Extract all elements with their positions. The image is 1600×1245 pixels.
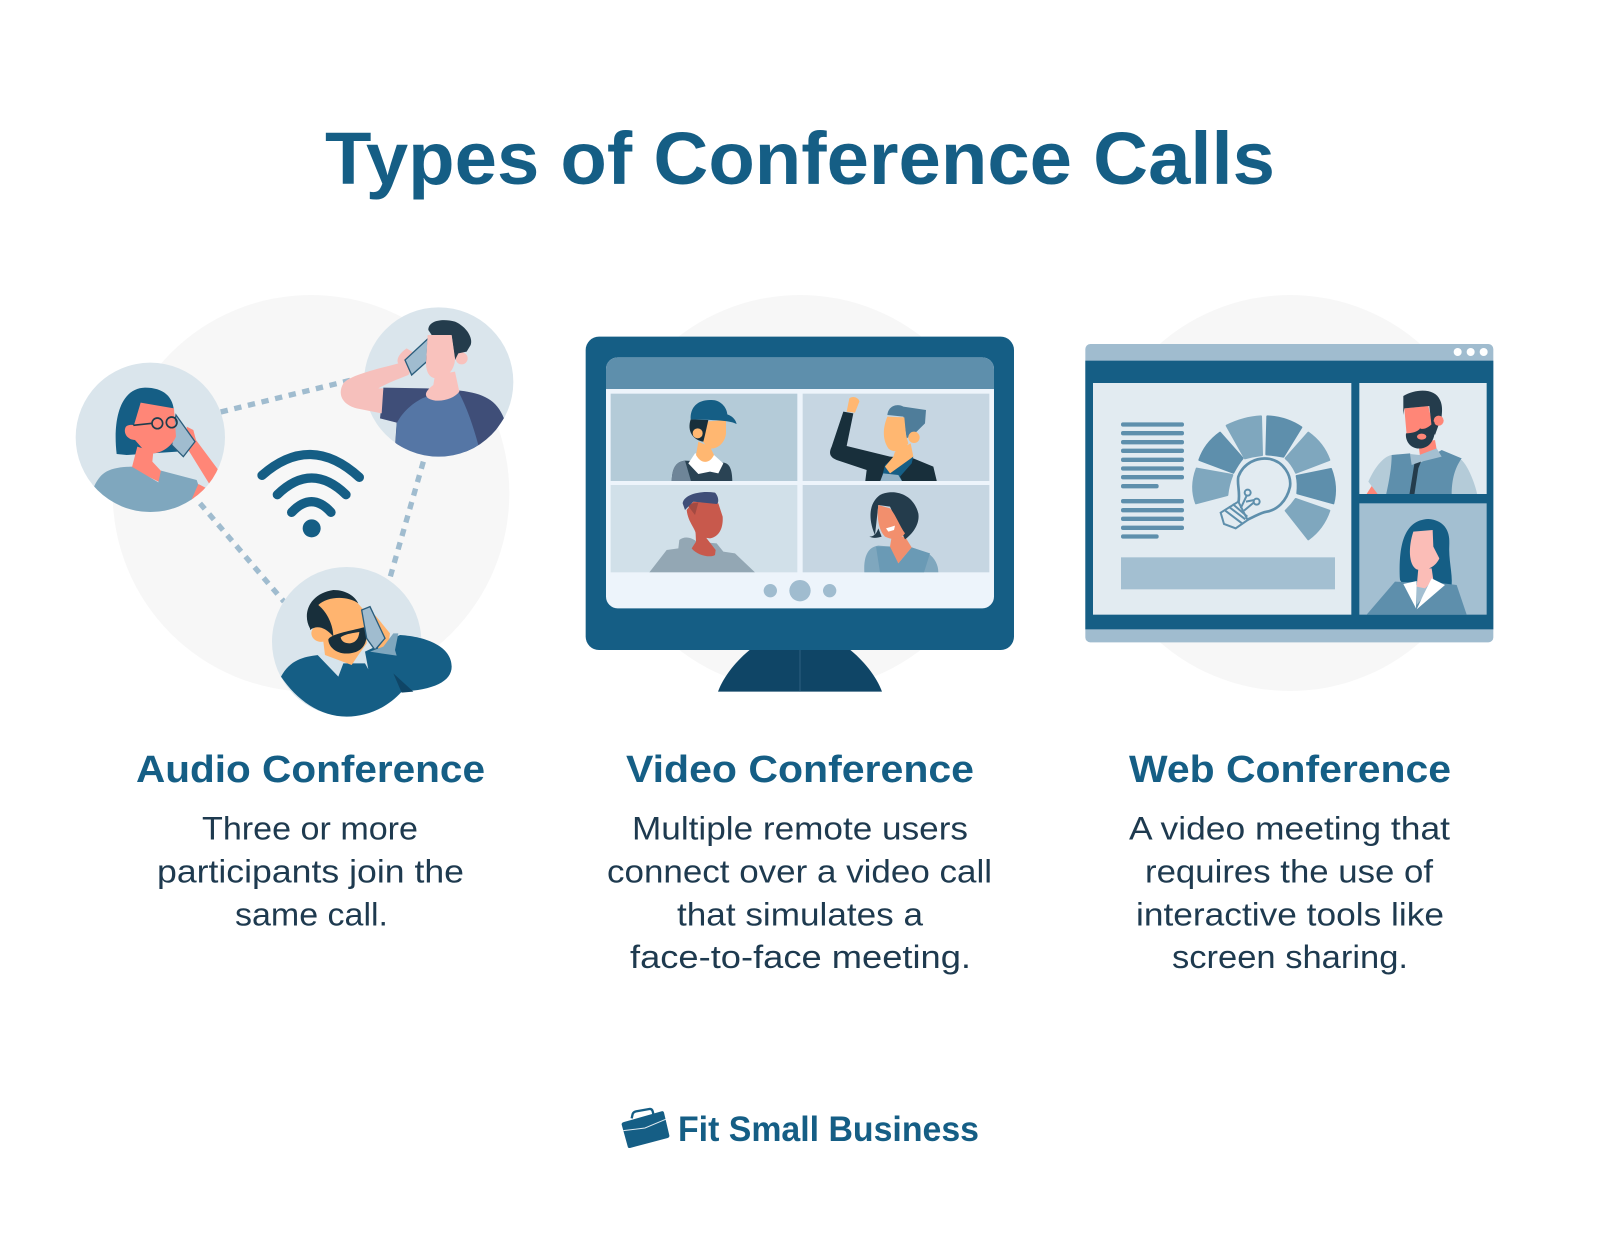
icon: lightbulb with radial segments [1193,416,1335,539]
video tile: person with cap [611,394,797,483]
text block: audio conference description: same call. [235,896,388,932]
icon: wifi [262,454,359,537]
shared presentation slide [1093,383,1351,615]
browser window [1085,344,1493,642]
monitor frame [586,337,1014,650]
heading: video conference: Video Conference [626,749,974,791]
person: man with t-shirt on phone [341,307,513,467]
video tile: woman with bob [803,485,989,572]
panel: web conference illustration [1085,344,1494,642]
text block: web conference description: A video meeting that [1129,810,1450,846]
window inner frame [1085,361,1493,629]
window control dots [1454,348,1488,356]
text block: web conference description: interactive tools like [1136,896,1444,932]
participant: bearded man in vest [1359,383,1487,495]
screen top bar [606,357,994,389]
logo wordmark: Fit Small Business [678,1110,979,1149]
heading: web conference: Web Conference [1129,749,1451,791]
person: bearded man on phone [272,567,452,717]
text block: video conference description: connect over a video call [607,854,992,890]
text block: video conference description [607,810,992,975]
heading: audio conference: Audio Conference [136,749,485,791]
text block: web conference description: requires the use of [1145,854,1433,890]
slide caption block [1121,557,1335,589]
participant: woman in blazer [1359,503,1487,615]
text block: web conference description [1129,810,1450,975]
text block: audio conference description: participants join the [157,854,464,890]
text block: video conference description: that simulates a [677,896,923,932]
person: woman on phone [76,363,225,520]
panel: video conference illustration [586,336,1014,692]
text block: video conference description: face-to-face meeting. [630,939,971,975]
panel: audio conference illustration [76,295,513,717]
logo: Fit Small Business [622,1109,979,1149]
screen control dots [764,580,836,601]
video tile: man in hoodie [611,485,797,572]
text block: web conference description: screen sharing. [1172,939,1408,975]
background circle [602,295,998,691]
icon: briefcase [622,1109,669,1148]
background circle [113,295,509,692]
dotted connection lines [200,380,423,602]
monitor stand [718,648,882,692]
text block: video conference description: Multiple remote users [632,810,968,846]
slide text lines [1121,422,1184,539]
title: Types of Conference Calls [325,117,1275,200]
video tile: man waving [803,394,989,483]
text block: audio conference description: Three or more [202,810,418,846]
monitor screen [606,357,994,608]
background circle [1092,295,1488,691]
text block: audio conference description [157,810,464,932]
